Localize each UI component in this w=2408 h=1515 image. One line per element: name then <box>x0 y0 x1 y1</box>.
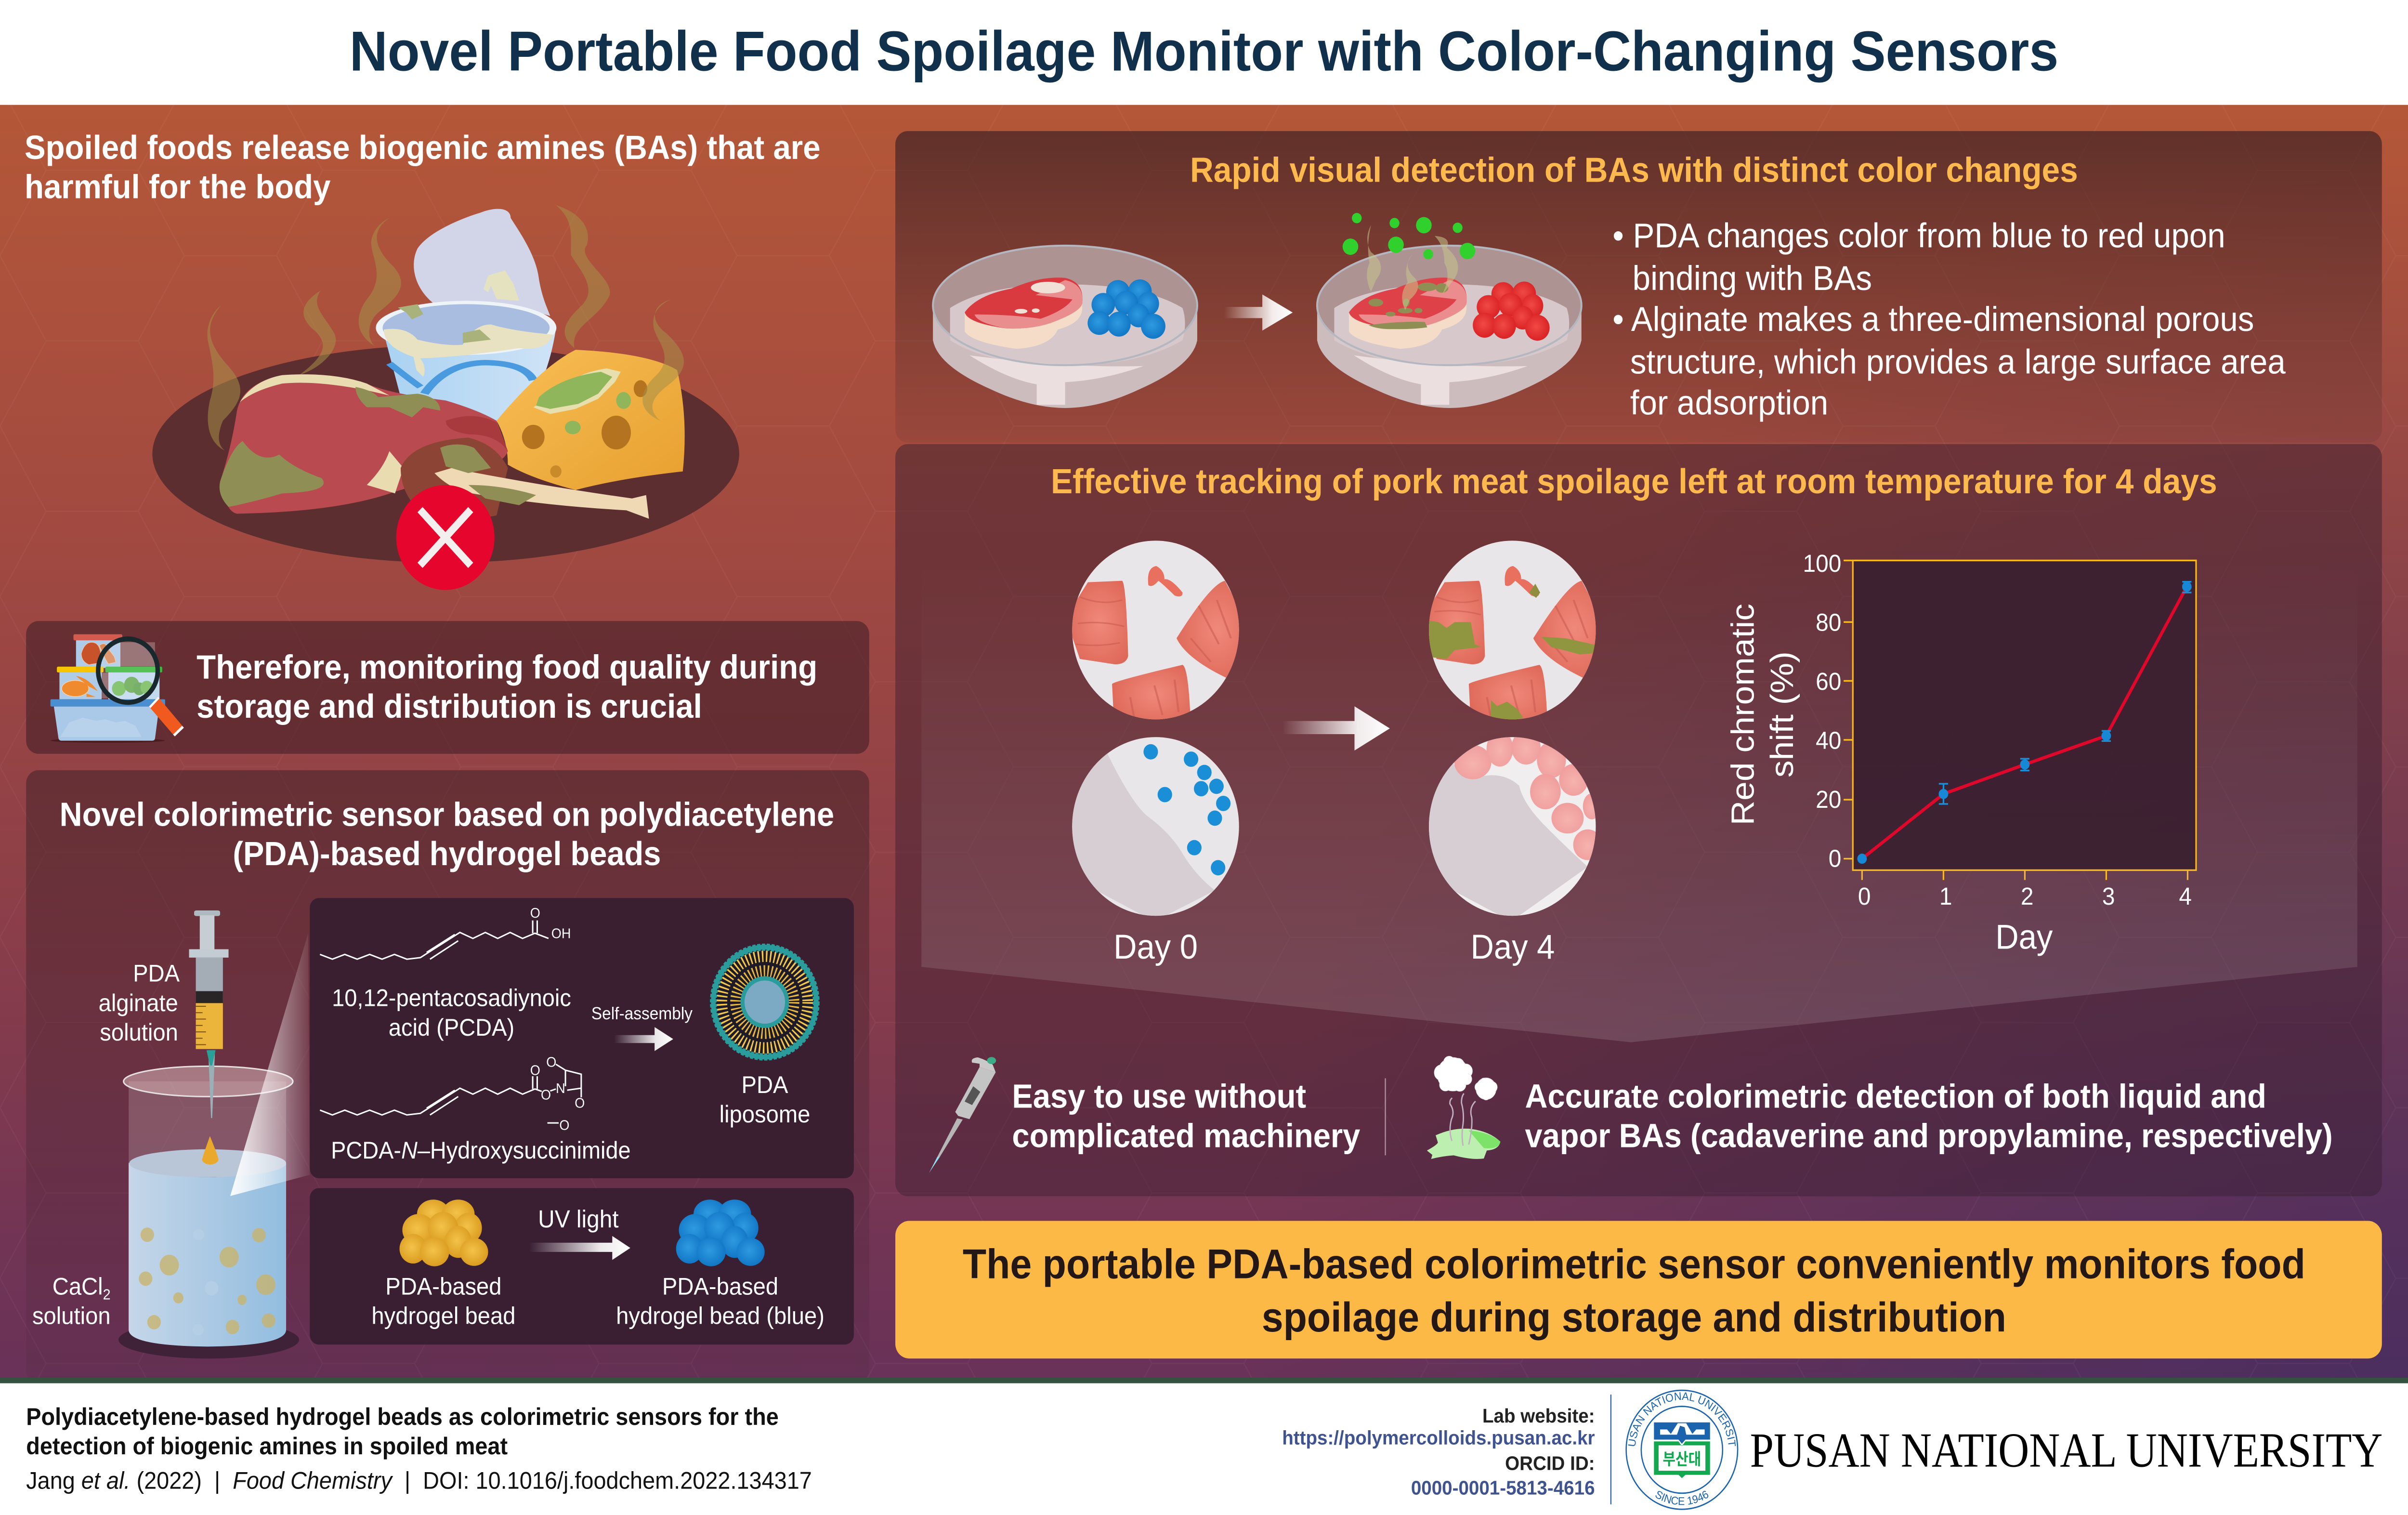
chevron background <box>921 557 2357 1042</box>
icon: day 4 meat <box>1428 540 1596 720</box>
arrow: UV light <box>529 1236 630 1260</box>
label: PDA-based hydrogel bead blue <box>616 1273 824 1330</box>
y axis labels: 20 <box>1816 786 1841 813</box>
beaker shadow <box>118 1321 299 1358</box>
icon: petri dish fresh meat with blue beads <box>933 246 1197 408</box>
icon: day 0 beads <box>1066 737 1239 922</box>
text: PDA bullets: structure, which provides a large surface area <box>1630 343 2286 381</box>
panel: rapid visual detection <box>895 131 2382 442</box>
label: PDA-based hydrogel bead blue: hydrogel bead (blue) <box>616 1303 824 1330</box>
x axis labels: 4 <box>2179 883 2192 910</box>
y axis labels: 60 <box>1816 668 1841 696</box>
icon: yellow hydrogel beads <box>400 1199 488 1266</box>
text: accurate detection: vapor BAs (cadaverine and propylamine, respectively) <box>1525 1117 2333 1155</box>
label: PCDA name: acid (PCDA) <box>389 1014 514 1041</box>
arrow: dish change <box>1224 294 1293 330</box>
label: PCDA name: 10,12-pentacosadiynoic <box>332 985 571 1012</box>
beaker water <box>129 1163 286 1346</box>
data line <box>1862 587 2187 859</box>
icon: drumstick and bone <box>401 438 508 519</box>
icon: odor wisps back <box>299 205 610 375</box>
title: Novel Portable Food Spoilage Monitor with Color-Changing Sensors <box>350 20 2058 82</box>
lab website and ORCID: ORCID ID: <box>1505 1452 1595 1475</box>
y axis title <box>1725 604 1800 825</box>
logo: Pusan National University seal <box>1625 1389 1739 1510</box>
panel: hydrogel beads <box>310 1188 854 1344</box>
plot area <box>1853 560 2196 870</box>
arrow: day 0 to day 4 <box>1283 706 1390 751</box>
heading: rapid visual detection: Rapid visual detection of BAs with distinct color changes <box>1190 151 2078 189</box>
logo: Pusan National University seal: PUSAN NATIONAL UNIVERSITY <box>1628 1392 1736 1446</box>
icon: red cross warning <box>396 485 495 590</box>
label: CaCl2 solution: solution <box>32 1303 111 1330</box>
icon: PDA liposome <box>713 947 816 1057</box>
x axis labels <box>1858 883 2192 910</box>
light beam <box>230 934 310 1196</box>
citation: Jang et al. (2022) | Food Chemistry | DOI: 10.1016/j.foodchem.2022.134317 <box>26 1467 812 1494</box>
data points <box>1858 581 2192 864</box>
icon: day 0 meat <box>1072 540 1239 720</box>
y axis labels: 0 <box>1829 845 1841 872</box>
label: CaCl2 solution: 2 <box>103 1287 111 1303</box>
label: self-assembly: Self-assembly <box>591 1004 693 1023</box>
label: day 4: Day 4 <box>1470 927 1555 966</box>
syringe <box>189 910 229 1049</box>
heading: effective tracking: Effective tracking of pork meat spoilage left at room temperature for 4 days <box>1051 462 2217 501</box>
y axis labels: 80 <box>1816 609 1841 636</box>
illustration: beaker and syringe <box>118 910 310 1358</box>
chemical: PCDA-NHS: O <box>559 1118 569 1133</box>
chemical: PCDA-NHS: O <box>541 1087 551 1103</box>
panel: monitoring food quality <box>26 621 869 754</box>
callout: conclusion: The portable PDA-based colorimetric sensor conveniently monitors food <box>963 1240 2305 1287</box>
icon: odor wisps front <box>208 299 684 450</box>
heading: novel sensor: (PDA)-based hydrogel beads <box>233 835 661 873</box>
y axis labels <box>1803 550 1841 872</box>
text: easy to use: Easy to use without <box>1012 1078 1306 1115</box>
chemical: PCDA-NHS: O <box>530 1063 540 1078</box>
lab website and ORCID <box>1282 1405 1595 1499</box>
text: PDA bullets: for adsorption <box>1630 383 1828 422</box>
lab website and ORCID: Lab website: <box>1482 1405 1595 1427</box>
chemical: PCDA-NHS: O <box>575 1095 585 1111</box>
label: PDA alginate solution <box>99 960 180 1046</box>
beaker glass <box>129 1081 286 1346</box>
text: easy to use: complicated machinery <box>1012 1117 1361 1155</box>
icon: blue hydrogel beads <box>676 1199 765 1266</box>
citation: Polydiacetylene-based hydrogel beads as colorimetric sensors for the <box>26 1404 779 1430</box>
x axis labels: 0 <box>1858 883 1871 910</box>
icon: spoiled steak <box>220 374 508 514</box>
icon: pipette <box>929 1057 996 1173</box>
icon: petri dish spoiled meat with red beads <box>1317 213 1582 408</box>
heading: spoiled foods: Spoiled foods release biogenic amines (BAs) that are <box>25 129 821 166</box>
icon: cheese wedge <box>497 350 685 490</box>
chemical: PCDA <box>320 905 571 959</box>
icon: day 4 beads <box>1423 730 1602 922</box>
error bars <box>1939 582 2191 804</box>
arrow: self-assembly <box>614 1027 673 1051</box>
text: PDA bullets: • PDA changes color from blue to red upon <box>1612 216 2225 255</box>
label: PDA-based hydrogel bead blue: PDA-based <box>662 1273 778 1300</box>
label: PDA alginate solution: PDA <box>133 960 180 987</box>
callout: conclusion <box>895 1221 2382 1358</box>
chart: red chromatic shift <box>1725 550 2196 956</box>
lab website and ORCID: 0000-0001-5813-4616 <box>1411 1477 1595 1499</box>
text: monitoring: storage and distribution is crucial <box>196 688 702 725</box>
panel: pork meat tracking <box>895 444 2382 1196</box>
label: PCDA name <box>332 985 571 1041</box>
x axis labels: 1 <box>1939 883 1952 910</box>
icon: yogurt lid <box>414 209 550 316</box>
lab website and ORCID: https://polymercolloids.pusan.ac.kr <box>1282 1427 1595 1449</box>
label: CaCl2 solution <box>32 1273 111 1330</box>
logo: Pusan National University seal: SINCE 1946 <box>1656 1490 1709 1505</box>
text: accurate detection: Accurate colorimetric detection of both liquid and <box>1525 1078 2266 1115</box>
label: PDA-based hydrogel bead: PDA-based <box>385 1273 502 1300</box>
text: monitoring <box>196 648 817 725</box>
label: PDA liposome: PDA <box>742 1072 788 1098</box>
citation <box>26 1404 812 1494</box>
beaker rim <box>124 1066 293 1096</box>
footer band <box>0 1378 2408 1383</box>
text: PDA bullets: binding with BAs <box>1633 259 1872 298</box>
text: easy to use <box>1012 1078 1361 1155</box>
label: PDA liposome <box>720 1072 810 1128</box>
plate <box>152 345 739 563</box>
heading: novel sensor: Novel colorimetric sensor based on polydiacetylene <box>60 796 834 833</box>
label: CaCl2 solution: CaCl <box>52 1273 103 1300</box>
needle <box>208 1050 215 1118</box>
x axis labels: 2 <box>2021 883 2033 910</box>
label: PDA-based hydrogel bead: hydrogel bead <box>371 1303 515 1330</box>
heading: novel sensor <box>60 796 834 873</box>
label: PDA liposome: liposome <box>720 1101 810 1128</box>
y axis title: shift (%) <box>1764 651 1800 777</box>
citation: detection of biogenic amines in spoiled meat <box>26 1433 508 1460</box>
panel: colorimetric sensor <box>26 770 869 1383</box>
icon: food containers with magnifier <box>51 634 184 743</box>
text: PDA bullets <box>1612 216 2286 422</box>
drop <box>202 1136 219 1164</box>
beads in solution <box>139 1227 275 1335</box>
icon: yogurt cup <box>384 329 556 422</box>
label: PDA-based hydrogel bead <box>371 1273 515 1330</box>
label: day 0: Day 0 <box>1113 927 1198 966</box>
y axis labels: 40 <box>1816 727 1841 754</box>
y axis labels: 100 <box>1803 550 1841 578</box>
y axis title: Red chromatic <box>1725 604 1761 825</box>
logo: Pusan National University seal: 부산대 <box>1662 1450 1701 1468</box>
callout: conclusion: spoilage during storage and distribution <box>1262 1294 2006 1341</box>
chemical: PCDA: O <box>530 905 540 921</box>
chemical: PCDA-NHS: N <box>556 1080 565 1096</box>
panel: chemical structures <box>310 898 854 1178</box>
illustration: spoiled food on plate <box>152 205 739 563</box>
x axis labels: 3 <box>2102 883 2115 910</box>
chemical: PCDA-NHS <box>320 1054 585 1133</box>
label: PCDA-N-Hydroxysuccinimide: PCDA-N–Hydroxysuccinimide <box>331 1137 631 1164</box>
chemical: PCDA: OH <box>551 926 571 941</box>
heading: spoiled foods: harmful for the body <box>25 169 331 206</box>
label: PDA alginate solution: solution <box>100 1019 178 1046</box>
axis ticks <box>1844 560 2187 880</box>
label: UV light: UV light <box>538 1206 619 1233</box>
text: monitoring: Therefore, monitoring food quality during <box>196 648 817 686</box>
heading: spoiled foods <box>25 129 821 206</box>
x axis title: Day <box>1995 918 2053 956</box>
text: PDA bullets: • Alginate makes a three-dimensional porous <box>1612 300 2254 339</box>
label: PDA alginate solution: alginate <box>99 990 178 1016</box>
chemical: PCDA-NHS: O <box>546 1054 556 1070</box>
text: accurate detection <box>1525 1078 2333 1155</box>
icon: vapor cloud over liquid <box>1427 1056 1500 1159</box>
